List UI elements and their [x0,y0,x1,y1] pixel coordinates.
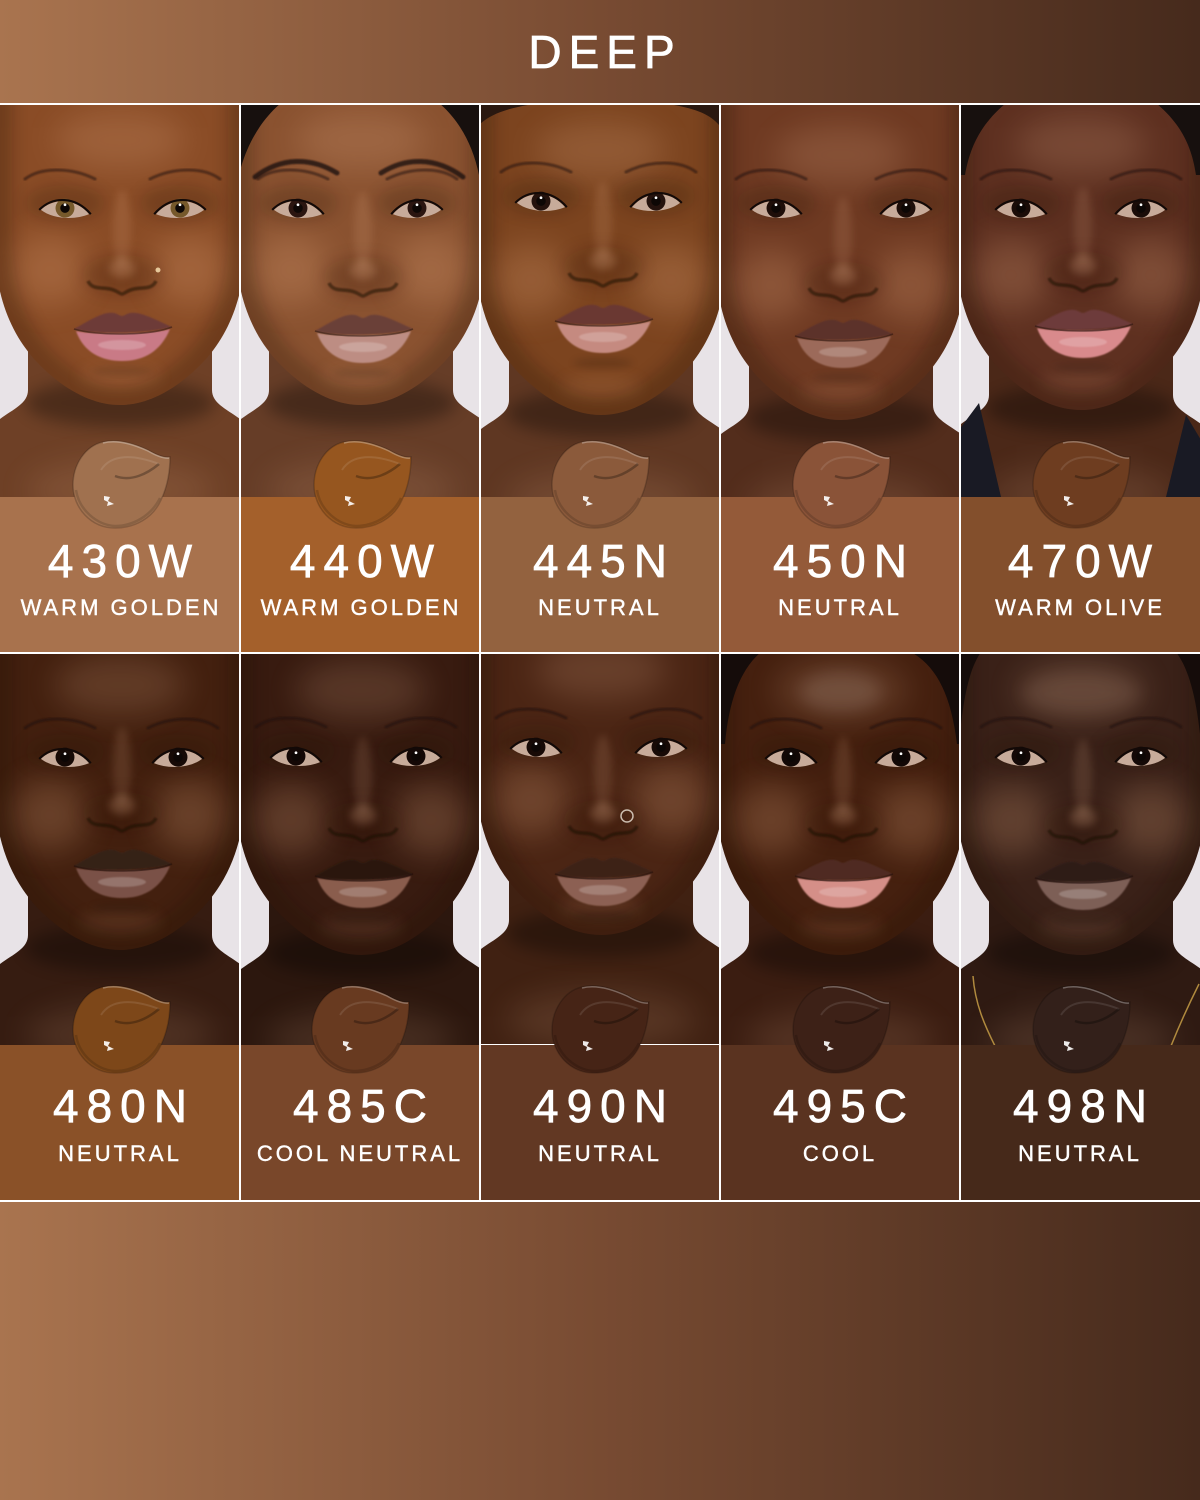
colour band 440W [241,497,479,652]
panel: shade 430W [0,45,246,652]
title: DEEP: DEEP [528,26,682,78]
swatch 440W [314,441,411,528]
shade code 430W: 430W [48,535,200,587]
panel: shade 490N [475,575,727,1200]
panel: shade 445N [475,55,727,652]
undertone 445N: NEUTRAL [538,595,662,620]
panel: shade 495C [715,595,967,1200]
colour band 470W [961,497,1200,652]
shade code 490N: 490N [533,1080,675,1132]
swatch 495C [793,986,890,1073]
portrait 450N [721,105,959,497]
swatch 490N [552,986,649,1073]
undertone 430W: WARM GOLDEN [21,595,221,620]
shade code 480N: 480N [53,1080,195,1132]
undertone 495C: COOL [803,1141,877,1166]
undertone 490N: NEUTRAL [538,1141,662,1166]
colour band 450N [721,497,959,652]
colour band 498N [961,1045,1200,1200]
swatch 485C [312,986,409,1073]
colour band 445N [481,497,719,652]
panel: shade 440W [235,45,487,652]
colour band 495C [721,1045,959,1200]
undertone 480N: NEUTRAL [58,1141,182,1166]
portrait 480N [0,654,239,1045]
portrait 498N [961,654,1200,1045]
swatch 480N [73,986,170,1073]
colour band 485C [241,1045,479,1200]
swatch 498N [1033,986,1130,1073]
portrait 490N [481,654,719,1044]
shade code 495C: 495C [773,1080,915,1132]
shade code 440W: 440W [290,535,442,587]
panel: shade 498N [955,595,1200,1200]
shade code 470W: 470W [1008,535,1160,587]
undertone 485C: COOL NEUTRAL [257,1141,463,1166]
panel: shade 450N [715,60,967,652]
footer gradient band [0,1202,1200,1500]
undertone 498N: NEUTRAL [1018,1141,1142,1166]
shade code 485C: 485C [293,1080,435,1132]
shade code 445N: 445N [533,535,675,587]
swatch 450N [793,441,890,528]
portrait 440W [241,105,479,497]
portrait 485C [241,654,479,1045]
portrait 470W [961,105,1200,497]
panel: shade 485C [235,595,487,1200]
colour band 480N [0,1045,239,1200]
undertone 470W: WARM OLIVE [995,595,1165,620]
portrait 445N [481,105,719,497]
portrait 495C [721,654,959,1045]
undertone 440W: WARM GOLDEN [261,595,461,620]
panel: shade 480N [0,590,246,1200]
colour band 490N [481,1045,719,1200]
portrait 430W [0,105,239,497]
swatch 470W [1033,441,1130,528]
panel: shade 470W [955,50,1200,652]
shade code 498N: 498N [1013,1080,1155,1132]
colour band 430W [0,497,239,652]
swatch 430W [73,441,170,528]
undertone 450N: NEUTRAL [778,595,902,620]
title band [0,0,1200,103]
shade code 450N: 450N [773,535,915,587]
swatch 445N [552,441,649,528]
